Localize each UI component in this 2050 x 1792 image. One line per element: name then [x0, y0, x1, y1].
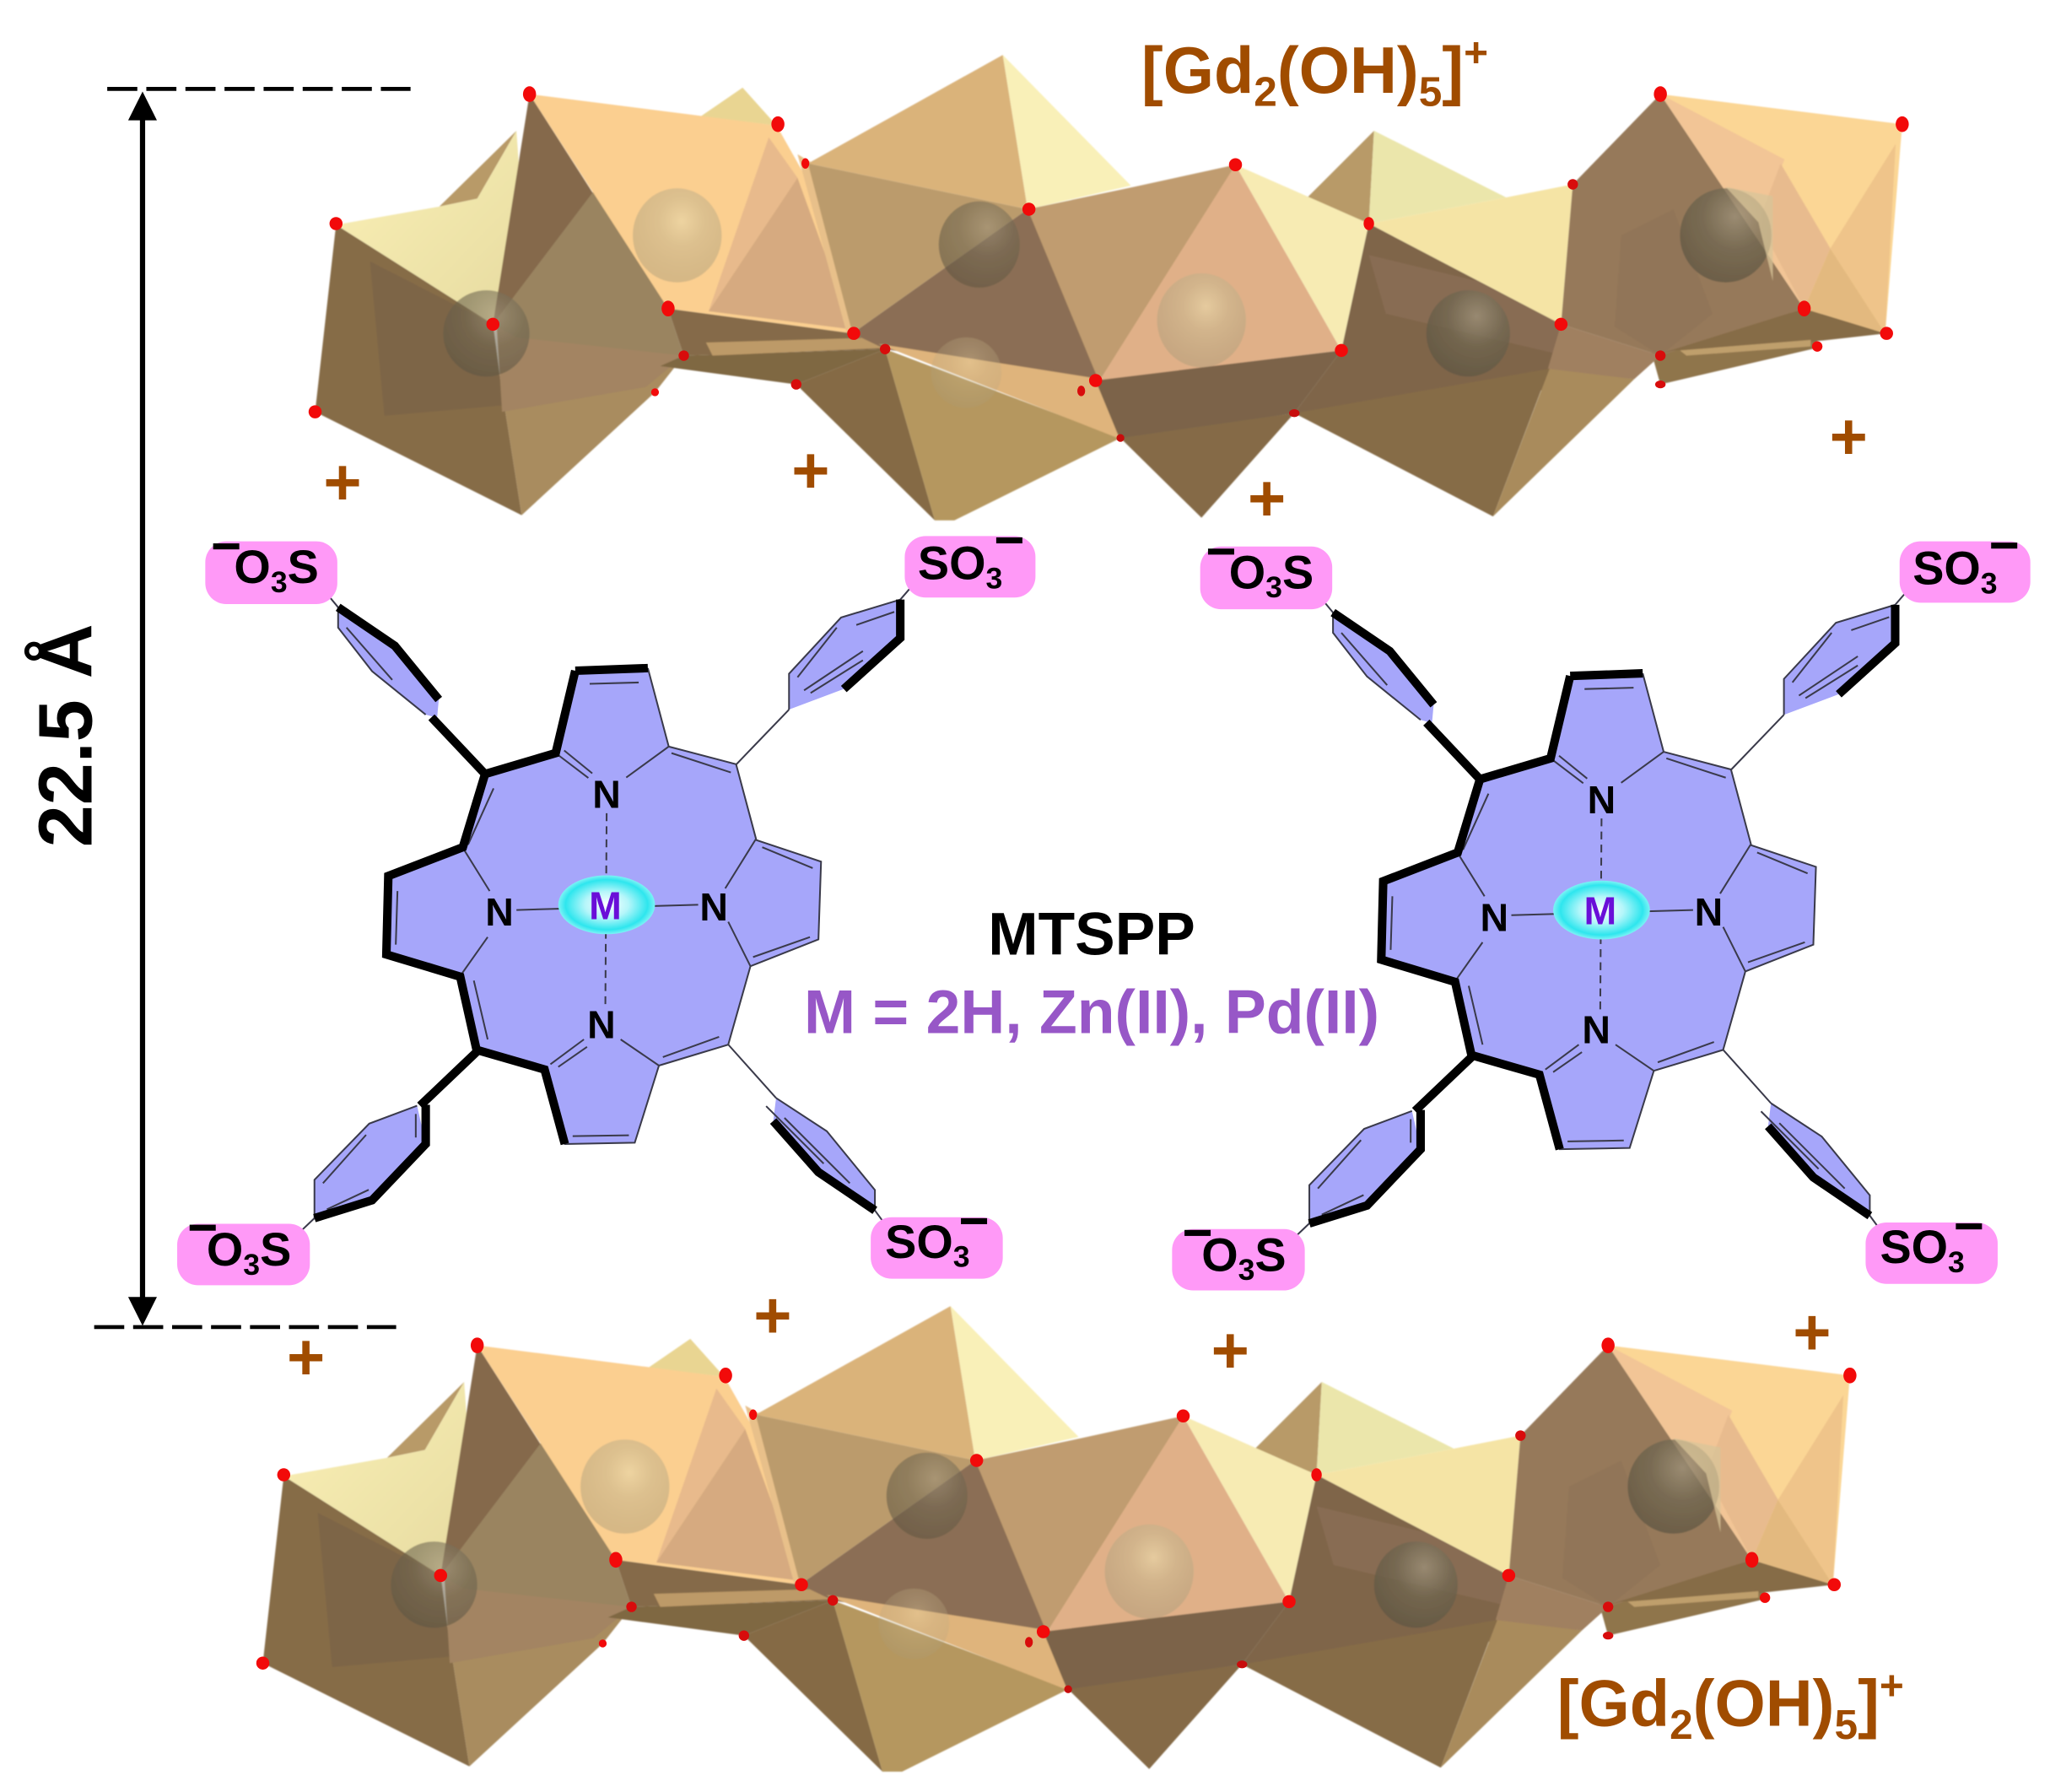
spheres are soft shaded ellipses — [633, 188, 721, 283]
porphyrin molecule left — [177, 536, 1035, 1285]
MTSPP heading: MTSPP — [988, 900, 1195, 968]
sulfonate group bottom right: 3 — [1948, 1245, 1965, 1279]
top layer formula label: + — [1464, 29, 1488, 76]
spacing value label: 22.5 Å — [24, 623, 109, 847]
top layer formula label: [Gd — [1141, 35, 1254, 107]
positive charge markers: + — [791, 435, 829, 507]
polyhedral layer: bottom [Gd2(OH)5]+ sheet — [256, 1306, 1857, 1772]
metal centre highlight — [558, 876, 655, 934]
sulfonate group bottom left: O — [207, 1223, 243, 1276]
sulfonate group top left: S — [288, 541, 319, 593]
metal definition label: M = 2H, Zn(II), Pd(II) — [804, 977, 1379, 1046]
interlayer spacing dimension: dashed guides and double arrow — [94, 89, 411, 1327]
bottom layer formula label: [Gd — [1557, 1668, 1670, 1741]
sulfonate group bottom left: S — [260, 1223, 291, 1276]
sulfonate group top left: 3 — [1265, 570, 1282, 604]
top layer formula label: 5 — [1419, 68, 1442, 116]
positive charge markers: + — [1211, 1314, 1249, 1387]
positive charge markers: + — [1830, 401, 1868, 473]
ring nitrogen labels: N — [1695, 890, 1723, 934]
positive charge markers: + — [1248, 462, 1286, 535]
positive charge markers: + — [753, 1279, 792, 1352]
top layer formula label: 2 — [1254, 68, 1277, 116]
sulfonate group top right: 3 — [1981, 567, 1998, 601]
ring nitrogen labels: N — [592, 773, 621, 817]
top layer formula label: (OH) — [1277, 35, 1419, 107]
ring nitrogen labels: N — [1481, 895, 1508, 939]
sulfonate group top left: O — [234, 541, 271, 593]
bottom layer formula label: 2 — [1670, 1701, 1693, 1748]
sulfonate group bottom right: SO — [885, 1216, 953, 1268]
bottom layer formula label: (OH) — [1693, 1668, 1835, 1741]
sulfonate group bottom left: 3 — [1238, 1253, 1254, 1287]
ring nitrogen labels — [1481, 778, 1723, 1052]
ring nitrogen labels: N — [699, 885, 728, 929]
sulfonate group bottom right — [871, 1216, 1003, 1279]
positive charge markers: + — [1793, 1296, 1832, 1368]
porphyrin molecule right — [1172, 542, 2031, 1291]
molecule skeleton — [296, 576, 920, 1236]
top layer formula label: ] — [1442, 35, 1464, 107]
sulfonate group top left: O — [1229, 546, 1265, 598]
sulfonate group bottom right — [1865, 1221, 1998, 1284]
ring nitrogen labels: N — [587, 1002, 616, 1046]
ring nitrogen labels — [485, 773, 728, 1046]
sulfonate group bottom right: 3 — [953, 1240, 970, 1274]
ring nitrogen labels: N — [1588, 778, 1616, 822]
sulfonate group top left: 3 — [271, 565, 288, 599]
metal atom label: M — [1583, 889, 1616, 933]
sulfonate group bottom left: 3 — [243, 1248, 260, 1282]
positive charge markers: + — [287, 1321, 325, 1394]
polyhedral layer: top [Gd2(OH)5]+ sheet — [309, 55, 1909, 521]
molecule skeleton — [1291, 582, 1915, 1241]
sulfonate group bottom left — [1172, 1228, 1305, 1291]
sulfonate group top right — [1900, 542, 2031, 602]
sulfonate group top right — [904, 536, 1035, 597]
metal atom label: M — [589, 883, 622, 927]
sulfonate group top right: SO — [1912, 542, 1981, 595]
bottom layer formula label: + — [1880, 1662, 1904, 1709]
positive charge markers: + — [323, 446, 362, 519]
bottom layer formula label: ] — [1858, 1668, 1880, 1741]
sulfonate group top right: 3 — [986, 561, 1002, 595]
metal centre highlight — [1553, 881, 1650, 939]
sulfonate group bottom left — [177, 1223, 310, 1285]
sulfonate group top left — [1200, 546, 1332, 609]
sulfonate group bottom right: SO — [1880, 1221, 1948, 1273]
positive charge markers — [287, 401, 1868, 1394]
ring nitrogen labels: N — [485, 890, 514, 934]
sulfonate group bottom left: O — [1201, 1228, 1238, 1281]
sulfonate group top left: S — [1282, 546, 1314, 598]
sulfonate group top left — [205, 541, 337, 604]
ring nitrogen labels: N — [1582, 1008, 1610, 1052]
sulfonate group bottom left: S — [1254, 1228, 1287, 1281]
sulfonate group top right: SO — [918, 537, 986, 590]
bottom layer formula label: 5 — [1835, 1701, 1858, 1748]
